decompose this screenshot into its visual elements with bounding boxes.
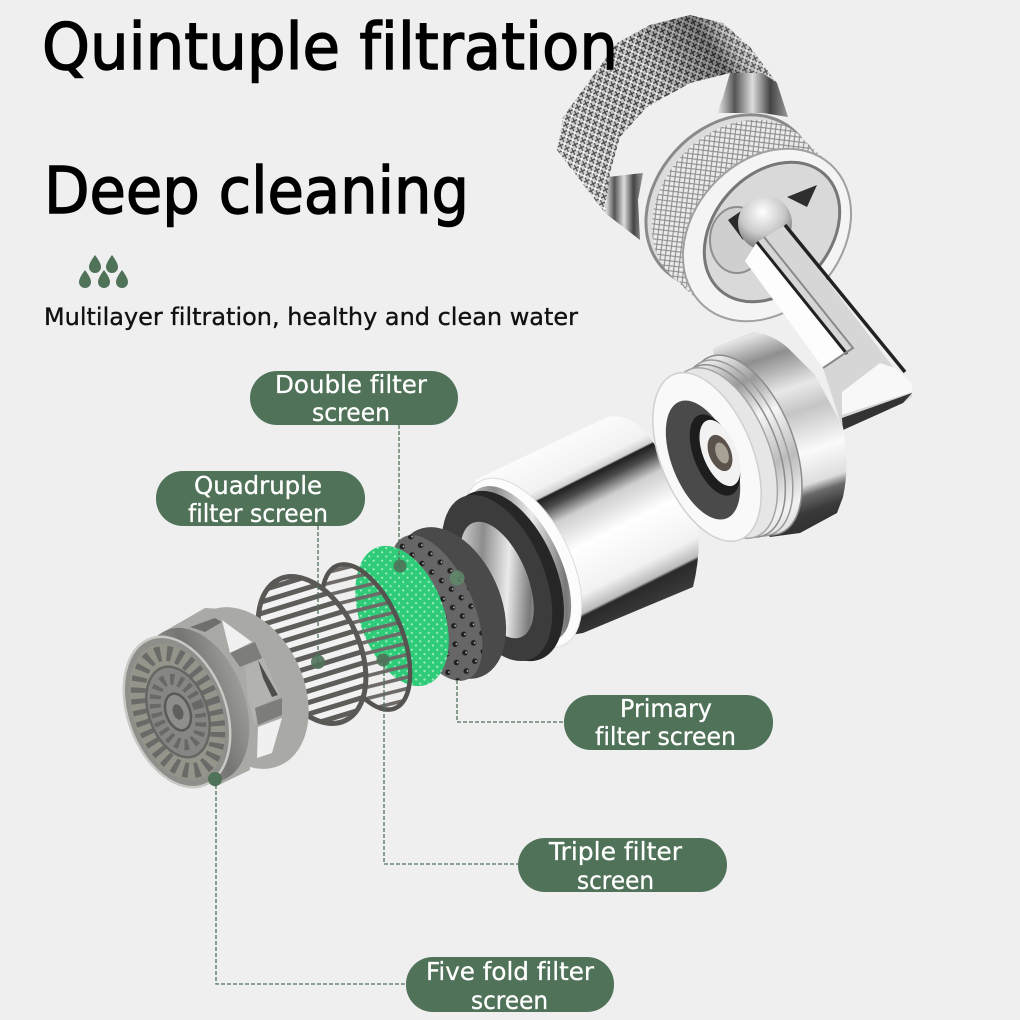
icon: double green filter disc bbox=[338, 533, 466, 699]
callout: quadruple filter screen: filter screen bbox=[188, 499, 328, 528]
icon: triple filter ring with bars bbox=[304, 552, 428, 722]
callout: double filter screen: screen bbox=[312, 398, 390, 427]
callout: five fold filter screen: Five fold filter bbox=[426, 957, 595, 986]
icon: five fold aerator cap bbox=[104, 586, 333, 802]
icon: back knurled ring of swivel joint bbox=[557, 15, 788, 240]
callout: primary filter screen: Primary bbox=[620, 694, 712, 723]
callout: triple filter screen: screen bbox=[577, 866, 654, 895]
icon: knurled nut with chrome face bbox=[611, 81, 886, 355]
icon: black rubber gasket bbox=[419, 474, 587, 678]
icon: elbow arm bbox=[745, 225, 912, 430]
icon: chrome cylinder housing bbox=[437, 416, 699, 667]
callout: five fold filter screen bbox=[208, 772, 614, 1015]
callout: triple filter screen bbox=[376, 654, 727, 895]
icon: threaded lower fitting bbox=[631, 332, 846, 557]
callout: quadruple filter screen bbox=[156, 471, 365, 669]
callout: double filter screen bbox=[250, 370, 458, 572]
icon: primary perforated filter disc bbox=[370, 510, 528, 696]
title: Quintuple filtration: Quintuple filtration bbox=[42, 11, 618, 85]
callout: five fold filter screen: screen bbox=[471, 986, 548, 1015]
callout: double filter screen: Double filter bbox=[275, 370, 428, 399]
title: Deep cleaning: Deep cleaning bbox=[44, 155, 469, 229]
subtitle: Multilayer filtration, healthy and clean water bbox=[44, 303, 578, 331]
icon: quadruple filter ring with bars bbox=[236, 559, 388, 741]
icon: water drops bbox=[79, 255, 128, 288]
callout: triple filter screen: Triple filter bbox=[548, 837, 683, 866]
callout: quadruple filter screen: Quadruple bbox=[194, 471, 322, 500]
callout: primary filter screen: filter screen bbox=[595, 722, 736, 751]
callout: primary filter screen bbox=[450, 570, 773, 751]
